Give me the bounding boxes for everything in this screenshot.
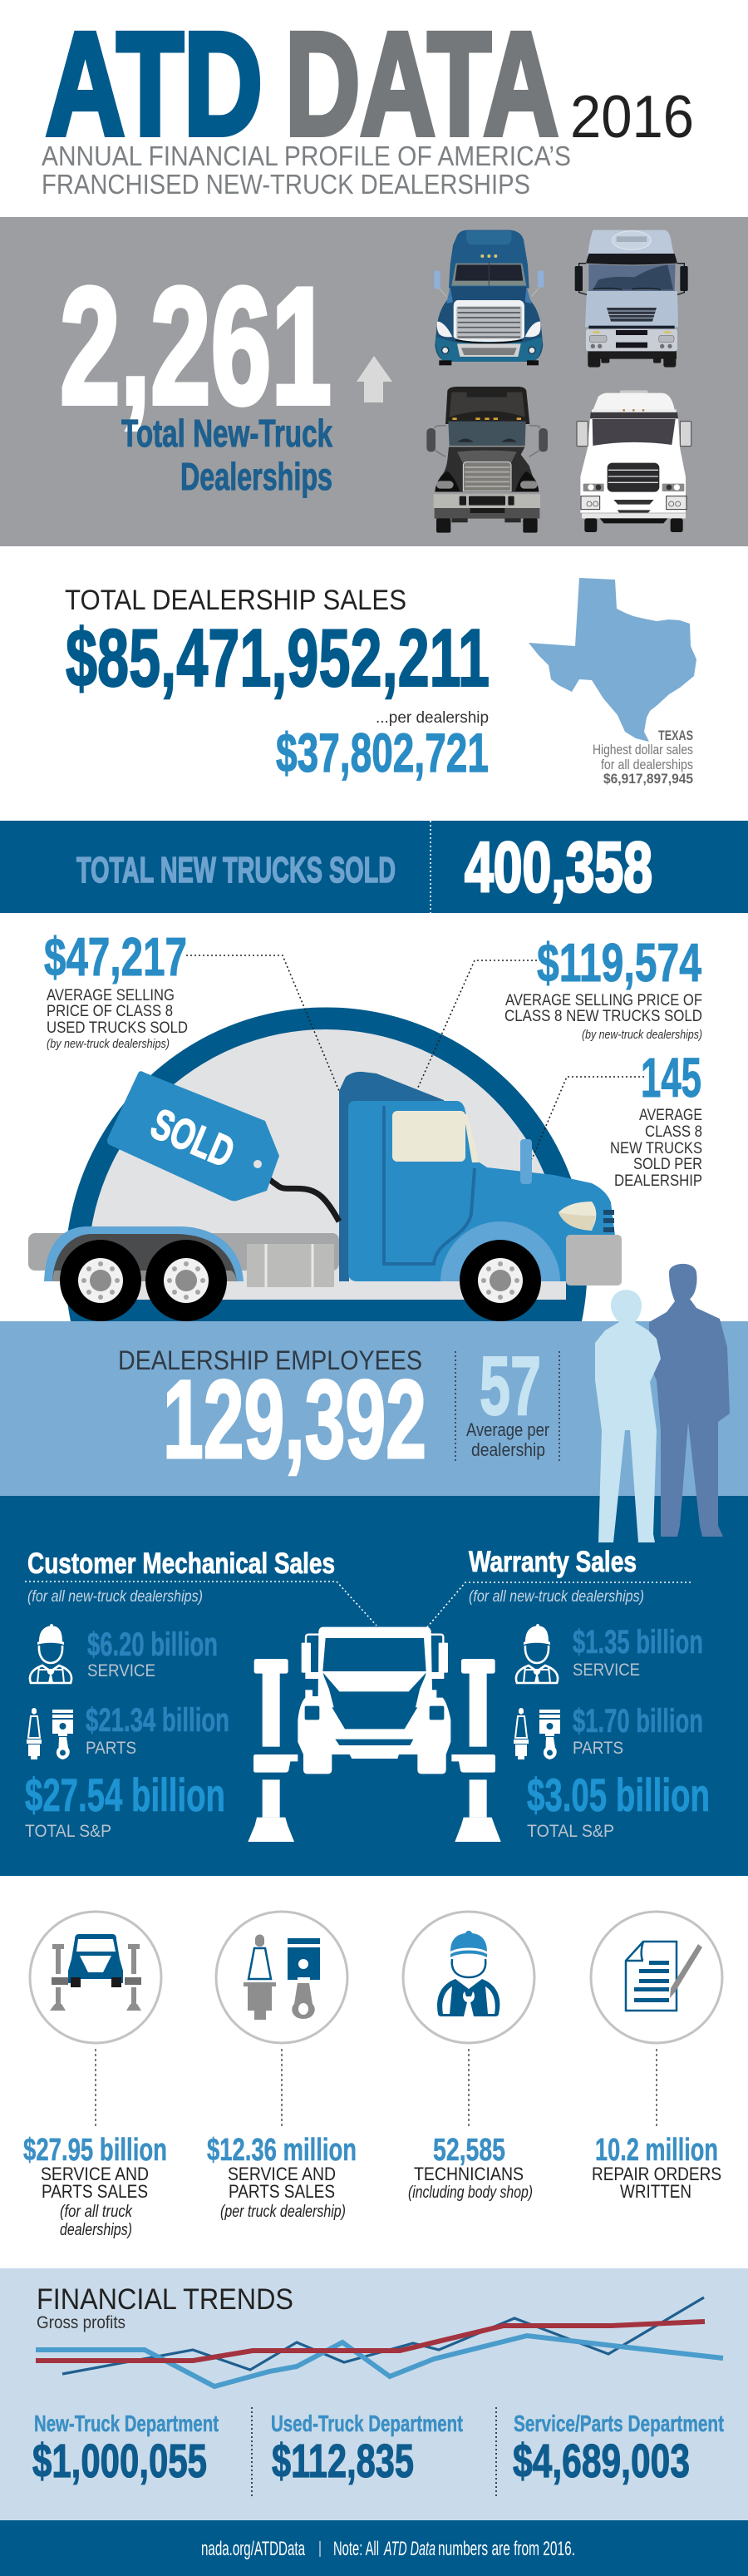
subtitle — [42, 141, 571, 200]
footer: numbers are from 2016. — [438, 2538, 575, 2560]
icon: up arrow — [357, 356, 392, 402]
subtitle: ANNUAL FINANCIAL PROFILE OF AMERICA’S — [42, 141, 571, 171]
stat: repair orders: REPAIR ORDERS — [592, 2164, 721, 2184]
subtitle: FRANCHISED NEW-TRUCK DEALERSHIPS — [42, 169, 530, 200]
icon: silver truck — [575, 230, 688, 368]
icon: spark plug and piston — [514, 1708, 560, 1759]
employee totals: 129,392 — [163, 1358, 426, 1482]
title: DATA — [285, 3, 559, 166]
column: warranty sales: PARTS — [573, 1739, 623, 1758]
callout: trucks per dealership: DEALERSHIP — [614, 1172, 702, 1190]
panel: total dealership sales: $37,802,721 — [276, 722, 489, 783]
panel: total dealership sales: TOTAL DEALERSHIP SALES — [65, 585, 406, 616]
column: customer mechanical sales — [25, 1547, 376, 1841]
stat: technicians: (including body shop) — [408, 2184, 533, 2202]
callout: used truck price: PRICE OF CLASS 8 — [47, 1003, 173, 1020]
panel: total dealership sales: ...per dealership — [376, 709, 489, 727]
stat: service/parts department: $4,689,003 — [513, 2435, 690, 2488]
icon: technician — [30, 1624, 71, 1683]
callout: new truck price: (by new-truck dealerships) — [582, 1028, 702, 1042]
stat: used-truck department: $112,835 — [272, 2435, 414, 2488]
callout: used truck price — [44, 926, 339, 1091]
callout: trucks per dealership: NEW TRUCKS — [610, 1140, 702, 1157]
stat: service and parts sales, all dealerships: PARTS SALES — [42, 2181, 148, 2202]
silhouette: employees — [595, 1264, 730, 1542]
column: warranty sales: SERVICE — [573, 1661, 640, 1680]
stat: service and parts sales, all dealerships: SERVICE AND — [41, 2164, 149, 2184]
footer: ATD Data — [383, 2538, 436, 2560]
panel: dealership employees — [0, 1321, 748, 1496]
stat: service and parts sales, all dealerships: $27.95 billion — [23, 2133, 167, 2168]
stat: new-truck department — [32, 2411, 219, 2488]
line chart: gross profits — [36, 2297, 723, 2386]
column: warranty sales: TOTAL S&P — [527, 1822, 614, 1841]
Texas callout: TEXAS — [658, 728, 693, 743]
stat: service and parts sales, per dealership: PARTS SALES — [229, 2181, 335, 2202]
callout: used truck price: AVERAGE SELLING — [47, 987, 175, 1004]
stat: repair orders — [591, 1912, 722, 2202]
employees per dealership: 57 — [480, 1340, 541, 1433]
callout: trucks per dealership: CLASS 8 — [645, 1123, 702, 1141]
stat: service/parts department — [513, 2411, 724, 2488]
panel: service and parts sales — [0, 1496, 748, 1876]
stat: service and parts sales, per dealership — [207, 1912, 357, 2221]
icon: technician — [403, 1912, 534, 2043]
dealership label: Total New-Truck — [121, 412, 332, 455]
panel: total dealership sales: $85,471,952,211 — [66, 612, 490, 703]
stat: technicians: TECHNICIANS — [414, 2164, 524, 2184]
stat: service and parts sales, per dealership: (per truck dealership) — [220, 2203, 346, 2221]
employees per dealership — [455, 1340, 559, 1463]
stat: service and parts sales, all dealerships: (for all truck — [60, 2203, 133, 2221]
column: customer mechanical sales: SERVICE — [87, 1661, 155, 1680]
callout: used truck price: USED TRUCKS SOLD — [47, 1019, 188, 1037]
column: customer mechanical sales: $27.54 billion — [25, 1769, 225, 1821]
label: total new trucks sold: TOTAL NEW TRUCKS SOLD — [76, 850, 396, 891]
map: Texas — [529, 578, 696, 742]
stat: technicians — [403, 1912, 534, 2202]
Texas callout: Highest dollar sales — [593, 742, 693, 758]
column: warranty sales: (for all new-truck dealerships) — [469, 1588, 644, 1606]
callout: trucks per dealership: 145 — [641, 1047, 701, 1109]
column: customer mechanical sales: $21.34 billion — [86, 1702, 229, 1739]
employees per dealership: dealership — [471, 1439, 545, 1460]
icon: blue truck — [434, 230, 544, 365]
panel: total new trucks sold — [0, 821, 748, 913]
heading: financial trends — [37, 2283, 293, 2332]
dealership label — [121, 412, 332, 498]
icon: technician — [516, 1624, 558, 1683]
column: warranty sales: Warranty Sales — [469, 1546, 637, 1578]
Texas callout — [593, 728, 693, 787]
callout: trucks per dealership: AVERAGE — [639, 1107, 702, 1124]
column: warranty sales — [427, 1546, 710, 1841]
stat: service and parts sales, per dealership: SERVICE AND — [228, 2164, 336, 2184]
column: customer mechanical sales: TOTAL S&P — [25, 1822, 111, 1841]
callout: new truck price — [417, 932, 702, 1089]
icon: document and pen — [591, 1912, 722, 2043]
arch behind truck — [65, 1007, 588, 1321]
column: customer mechanical sales: $6.20 billion — [87, 1626, 218, 1663]
callout: used truck price: $47,217 — [44, 926, 187, 987]
stat: technicians: 52,585 — [433, 2133, 505, 2168]
Texas callout: $6,917,897,945 — [603, 771, 693, 787]
column: customer mechanical sales: (for all new-truck dealerships) — [27, 1588, 203, 1606]
panel: dealership count — [0, 217, 748, 546]
number: trucks sold: 400,358 — [465, 828, 652, 907]
icon: spark plug and piston — [27, 1708, 73, 1759]
stat: used-truck department — [271, 2411, 463, 2488]
callout: trucks per dealership — [532, 1047, 702, 1190]
heading: financial trends: Gross profits — [37, 2313, 125, 2332]
icon: white truck — [577, 390, 691, 532]
footer: Note: All — [333, 2538, 379, 2560]
title — [46, 3, 694, 166]
icon: truck on lift — [248, 1627, 501, 1842]
column: customer mechanical sales: PARTS — [86, 1739, 136, 1758]
price tag: SOLD — [107, 1071, 339, 1221]
dealership label: Dealerships — [180, 455, 332, 498]
footer — [0, 2520, 748, 2576]
title: ATD — [46, 3, 263, 166]
icon: black truck — [426, 387, 548, 533]
illustration: truck — [28, 1072, 622, 1321]
heading: financial trends: FINANCIAL TRENDS — [37, 2283, 293, 2316]
column: customer mechanical sales: Customer Mechanical Sales — [27, 1547, 335, 1580]
price tag: SOLD: SOLD — [144, 1100, 241, 1177]
callout: new truck price: CLASS 8 NEW TRUCKS SOLD — [504, 1008, 702, 1025]
callout: new truck price: AVERAGE SELLING PRICE OF — [505, 992, 702, 1009]
stat: used-truck department: Used-Truck Department — [271, 2411, 463, 2436]
stat: service and parts sales, per dealership: $12.36 million — [207, 2133, 357, 2168]
employees per dealership: Average per — [466, 1419, 549, 1440]
stat: repair orders: WRITTEN — [620, 2181, 691, 2202]
title: 2016 — [570, 84, 694, 151]
employee totals: DEALERSHIP EMPLOYEES — [118, 1345, 422, 1375]
callout: trucks per dealership: SOLD PER — [633, 1156, 702, 1173]
panel: financial trends — [0, 2268, 748, 2520]
stat: new-truck department: $1,000,055 — [32, 2435, 207, 2488]
footer: nada.org/ATDData — [201, 2538, 305, 2560]
panel: total dealership sales — [65, 585, 490, 783]
icon: truck on lift — [30, 1912, 161, 2043]
stat: new-truck department: New-Truck Department — [34, 2411, 219, 2436]
stat: service and parts sales, all dealerships — [23, 1912, 167, 2239]
stat: service and parts sales, all dealerships: dealerships) — [60, 2221, 132, 2239]
callout: used truck price: (by new-truck dealerships) — [47, 1037, 170, 1051]
Texas callout: for all dealerships — [601, 757, 693, 772]
employee totals — [118, 1345, 426, 1482]
icon: spark plug and piston — [216, 1912, 347, 2043]
number of dealerships: 2,261 — [60, 254, 332, 439]
